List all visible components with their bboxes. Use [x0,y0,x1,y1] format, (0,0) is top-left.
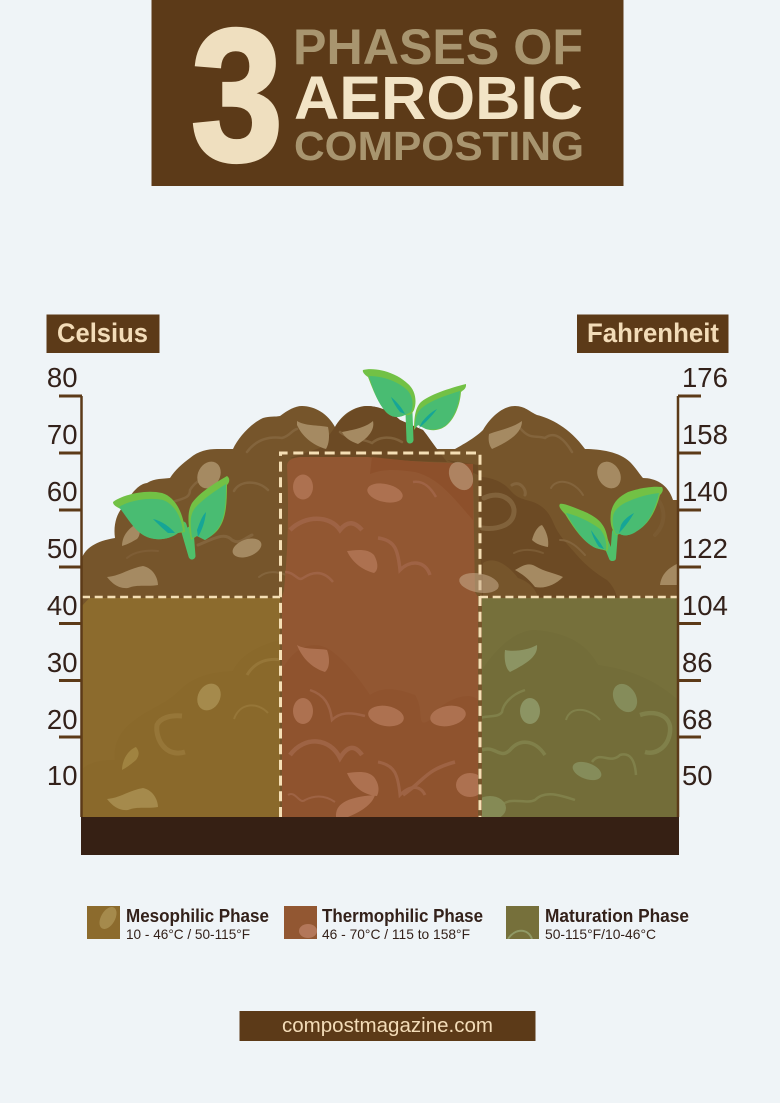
legend: mesophilic [87,906,268,939]
celsius numbers: 40 [47,590,78,621]
fahrenheit numbers: 68 [682,704,713,735]
ground bar [81,817,679,855]
legend: maturation [506,906,689,942]
mound pebbles [107,421,677,588]
title banner [152,0,624,200]
legend: thermophilic: 46 - 70°C / 115 to 158°F [322,926,470,942]
panel: mesophilic phase [81,598,282,817]
fahrenheit ticks [678,396,701,737]
compost mound [81,406,678,817]
plant: centre seedling [363,369,466,440]
mound swirls [127,428,663,585]
mound shading: centre and right [290,406,617,597]
title line: aerobic: AEROBIC [294,64,583,132]
fahrenheit axis [678,362,728,817]
footer website [240,1011,536,1041]
title line: phases of: PHASES OF [293,19,583,75]
thermophilic texture [282,457,484,817]
fahrenheit numbers [682,362,728,791]
title line: composting: COMPOSTING [294,123,584,169]
celsius label: Celsius [57,318,148,348]
celsius numbers: 60 [47,476,78,507]
legend: maturation: Maturation Phase [545,906,689,926]
footer website: compostmagazine.com [282,1015,493,1037]
fahrenheit numbers: 104 [682,590,728,621]
celsius numbers: 70 [47,419,78,450]
plant: right seedling [559,487,663,558]
legend: mesophilic: 10 - 46°C / 50-115°F [126,926,250,942]
pebbles overlapping the dashes [444,458,500,596]
celsius numbers [47,362,78,791]
celsius axis [47,362,82,817]
celsius ticks [59,396,82,737]
panel: maturation phase [474,598,678,820]
dashed phase boundaries [82,453,678,817]
fahrenheit numbers: 158 [682,419,728,450]
plant: left seedling [113,476,229,556]
celsius numbers: 10 [47,760,78,791]
legend: thermophilic: Thermophilic Phase [322,906,483,926]
legend: thermophilic [284,906,483,942]
fahrenheit numbers: 50 [682,760,713,791]
fahrenheit numbers: 122 [682,533,728,564]
maturation texture [482,645,672,817]
fahrenheit numbers: 140 [682,476,728,507]
fahrenheit numbers: 86 [682,647,713,678]
mesophilic texture [107,658,280,810]
celsius numbers: 50 [47,533,78,564]
panel: thermophilic phase [282,457,484,817]
legend: mesophilic: Mesophilic Phase [126,906,269,926]
fahrenheit label: Fahrenheit [587,318,719,348]
celsius numbers: 30 [47,647,78,678]
celsius numbers: 20 [47,704,78,735]
legend: maturation: 50-115°F/10-46°C [545,926,656,942]
celsius label [46,314,160,353]
celsius numbers: 80 [47,362,78,393]
fahrenheit numbers: 176 [682,362,728,393]
